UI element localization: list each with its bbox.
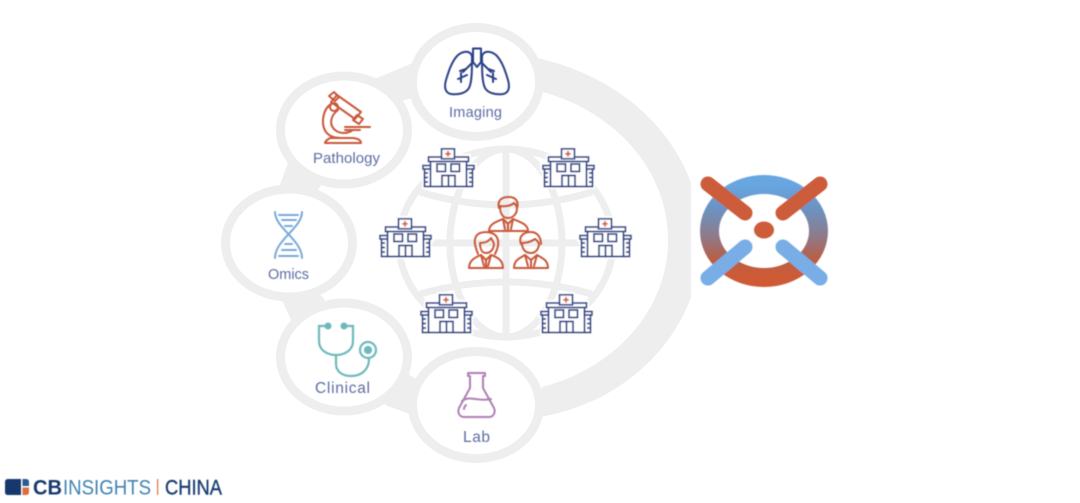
wordmark CB: CB: [33, 476, 62, 500]
connector: omics to clinical: [281, 290, 325, 322]
blue bars: [708, 247, 820, 278]
icon: lungs: [445, 48, 509, 94]
label: Imaging: Imaging: [449, 105, 502, 121]
separator: [157, 479, 158, 495]
label: Clinical: Clinical: [315, 380, 370, 397]
panel: background rings: [278, 58, 691, 417]
icon: hospital right: [579, 218, 632, 257]
globe: [399, 149, 613, 337]
logo: crossed target: [708, 184, 820, 278]
label: Lab: Lab: [463, 429, 490, 446]
footer: CB Insights China logo: [5, 476, 222, 500]
wordmark INSIGHTS: INSIGHTS: [63, 476, 151, 500]
red bars: [708, 184, 820, 213]
icon: doctors group: [469, 197, 548, 268]
icon: hospital top left: [422, 148, 475, 187]
big crescent arc: [537, 58, 691, 417]
male doctor: [514, 232, 548, 268]
connector: pathology to omics: [278, 160, 330, 190]
label: Pathology: Pathology: [313, 150, 380, 167]
label: Omics: Omics: [268, 267, 309, 283]
centre dot: [754, 222, 774, 238]
node: pathology: [280, 76, 408, 184]
icon: flask: [458, 373, 495, 417]
connector: clinical to lab: [385, 370, 415, 416]
icon: hospital top right: [542, 148, 595, 187]
icon: dna: [275, 212, 302, 258]
hospitals: [379, 148, 632, 333]
top doctor: [489, 197, 528, 231]
wordmark CHINA: CHINA: [165, 476, 222, 500]
node: imaging: [412, 28, 540, 136]
icon: hospital left: [379, 218, 432, 257]
node: lab: [412, 352, 540, 458]
node: clinical: [280, 303, 408, 411]
female doctor: [469, 232, 503, 268]
connector: imaging to pathology: [372, 60, 420, 102]
node: omics: [226, 189, 352, 297]
icon: microscope: [323, 92, 370, 143]
icon: stethoscope: [319, 324, 376, 376]
gradient ring: [710, 184, 818, 278]
icon: hospital bottom left: [420, 294, 473, 333]
logo mark: [5, 479, 29, 495]
icon: hospital bottom right: [540, 294, 593, 333]
